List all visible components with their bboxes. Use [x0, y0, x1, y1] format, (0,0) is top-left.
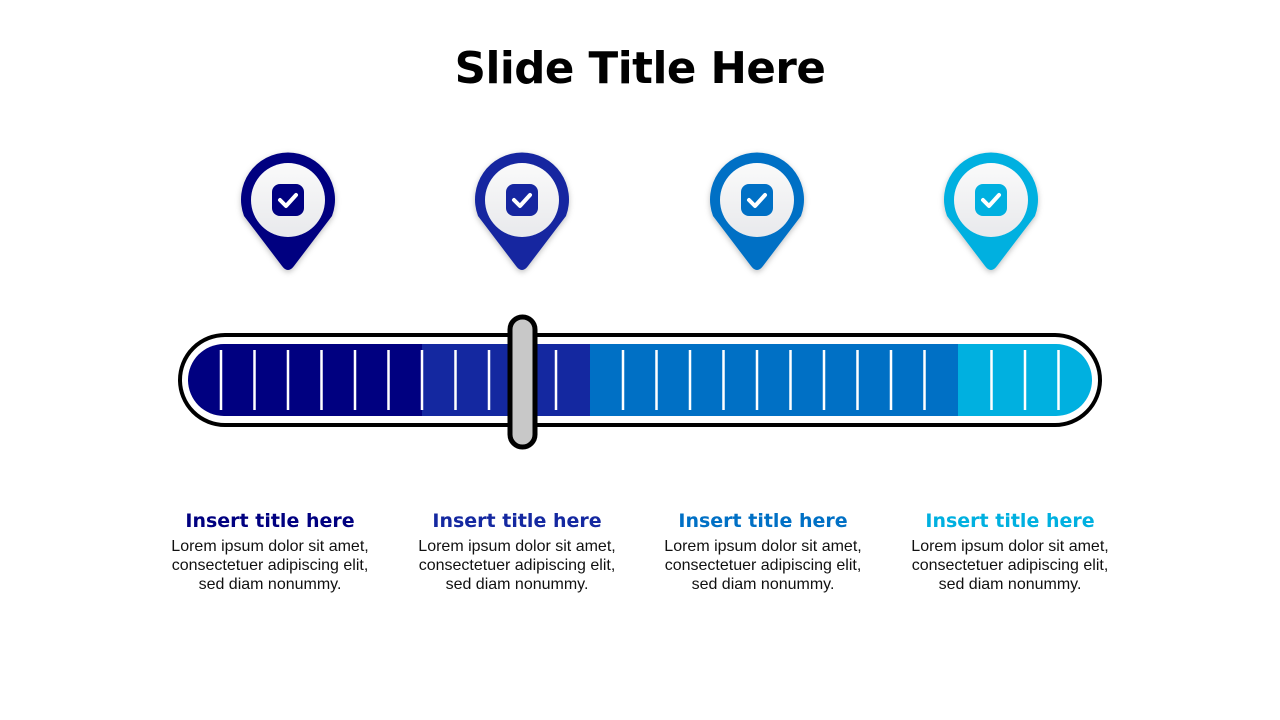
caption 3: Insert title here	[678, 510, 848, 532]
caption 2: sed diam nonummy.	[446, 576, 588, 593]
caption 1: Lorem ipsum dolor sit amet,	[171, 538, 369, 555]
caption 3: sed diam nonummy.	[692, 576, 834, 593]
caption 4: sed diam nonummy.	[939, 576, 1081, 593]
pin 2	[475, 152, 569, 270]
caption 3: Lorem ipsum dolor sit amet,	[664, 538, 862, 555]
title: Slide Title Here	[455, 44, 825, 94]
caption 1: Insert title here	[185, 510, 355, 532]
caption 3	[664, 510, 862, 593]
caption 4: Lorem ipsum dolor sit amet,	[911, 538, 1109, 555]
caption 4: consectetuer adipiscing elit,	[912, 557, 1108, 574]
slider knob	[510, 317, 535, 447]
pin 3	[710, 152, 804, 270]
caption 1: consectetuer adipiscing elit,	[172, 557, 368, 574]
caption 1	[171, 510, 369, 593]
pin 1	[241, 152, 335, 270]
graphic: pins and slider	[178, 152, 1102, 450]
caption 2: consectetuer adipiscing elit,	[419, 557, 615, 574]
slider bar	[180, 335, 1100, 425]
pin 4	[944, 152, 1038, 270]
caption 1: sed diam nonummy.	[199, 576, 341, 593]
caption 2: Insert title here	[432, 510, 602, 532]
caption 4: Insert title here	[925, 510, 1095, 532]
caption 3: consectetuer adipiscing elit,	[665, 557, 861, 574]
caption 2	[418, 510, 616, 593]
caption 4	[911, 510, 1109, 593]
caption 2: Lorem ipsum dolor sit amet,	[418, 538, 616, 555]
